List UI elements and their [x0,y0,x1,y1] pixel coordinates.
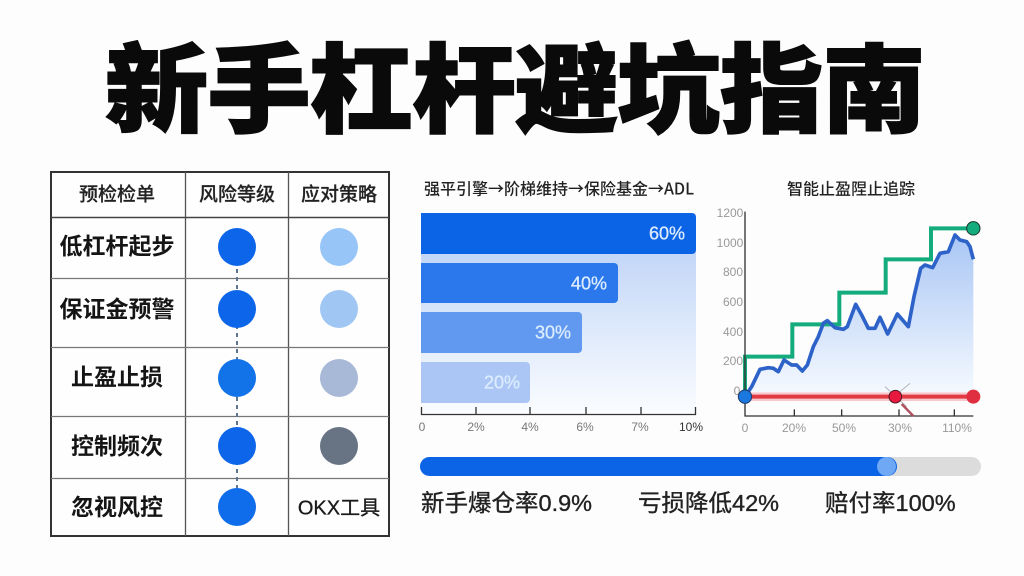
row label: stop loss: 止盈止损 [71,364,163,390]
tick 4%: 4% [521,420,539,434]
chart background gradient [421,235,696,415]
equity line [745,235,973,397]
trigger marker [889,390,902,403]
risk dot 4 [218,427,256,465]
x axis [420,407,696,416]
x label 20%: 20% [782,421,806,435]
stat: loss reduction: 亏损降低42% [638,490,779,516]
row label: low leverage: 低杠杆起步 [60,233,174,259]
title: 新手杠杆避坑指南 [105,37,925,145]
x label 50%: 50% [832,421,856,435]
header: strategy: 应对策略 [301,184,377,206]
label 60%: 60% [649,224,685,244]
panel: line chart [717,175,980,435]
header: checklist: 预检检单 [79,184,155,206]
risk dot 2 [218,290,256,328]
y label 1200: 1200 [717,206,743,220]
y label 0: 0 [734,384,740,398]
bar 60% [421,213,696,254]
x label 30%: 30% [888,421,912,435]
header: risk level: 风险等级 [199,184,275,206]
y label 800: 800 [723,265,743,279]
tick 0: 0 [419,420,425,434]
progress knob [877,457,896,476]
strategy dot 4 [320,427,358,465]
chart plot [738,212,980,417]
risk dot 5 [218,488,256,526]
tick 7%: 7% [631,420,649,434]
progress fill [420,457,897,476]
progress bar [420,457,981,476]
risk dot 1 [218,228,256,266]
bar 40% [421,263,618,303]
stat: payout rate: 赔付率100% [825,490,956,516]
row label: margin alert: 保证金预警 [60,296,174,322]
x label 110%: 110% [942,421,972,435]
take-profit marker [967,222,980,235]
risk dot 3 [218,359,256,397]
tick 10%: 10% [679,420,703,434]
strategy text: OKX tool: OKX工具 [298,498,380,520]
strategy dot 2 [320,290,358,328]
strategy dot 1 [320,228,358,266]
row label: frequency: 控制频次 [71,433,163,459]
strategy dot 3 [320,359,358,397]
panel: bar chart [419,175,703,434]
y label 1000: 1000 [717,236,743,250]
label 20%: 20% [484,372,520,392]
trailing take-profit steps [745,228,973,397]
label 30%: 30% [535,322,571,342]
stop trigger marks [885,383,913,416]
bar chart heading: 强平引擎→阶梯维持→保险基金→ADL [424,175,694,199]
tick 2%: 2% [467,420,485,434]
start marker [738,390,752,403]
bar 20% [421,362,530,403]
panel: checklist table [50,171,390,537]
end stop marker [966,390,980,404]
stop-loss line [745,384,973,410]
stat: liquidation rate: 新手爆仓率0.9% [421,490,592,516]
x label 0: 0 [742,421,748,435]
line chart heading: 智能止盈陧止追踪 [787,175,915,199]
row label: ignoring risk control: 忽视风控 [71,494,163,520]
area under equity line [745,235,973,397]
table grid [50,171,390,537]
y label 600: 600 [723,295,743,309]
label 40%: 40% [571,274,607,294]
tick 6%: 6% [576,420,594,434]
bar 30% [421,312,582,353]
y label 400: 400 [723,325,743,339]
y label 200: 200 [723,354,743,368]
axes [745,212,973,416]
